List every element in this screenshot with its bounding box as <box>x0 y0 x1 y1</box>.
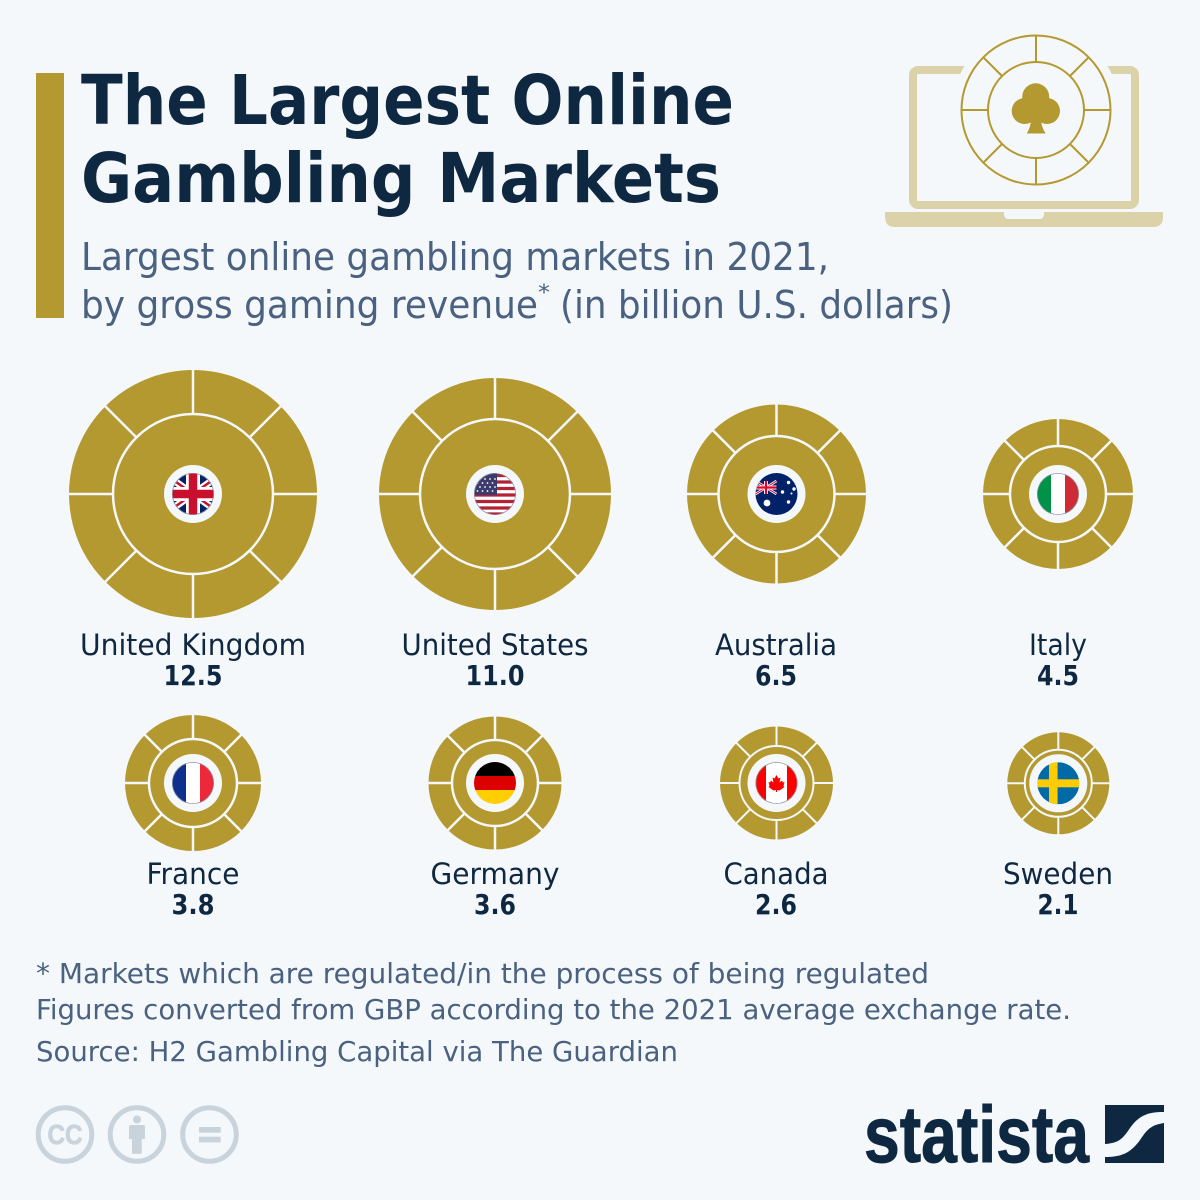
icon: creative commons attribution <box>38 1108 92 1161</box>
chip: Canada <box>718 725 834 841</box>
subtitle: * <box>538 281 550 306</box>
label: United States 11.0: United States <box>402 628 588 662</box>
label: Australia 6.5: Australia <box>715 628 837 662</box>
flag: United Kingdom <box>172 473 214 515</box>
label: Canada 2.6 <box>724 857 828 921</box>
footnotes: Figures converted from GBP according to the 2021 average exchange rate. <box>36 993 1071 1026</box>
label: France 3.8: 3.8 <box>172 888 214 921</box>
chip: Germany <box>427 715 563 851</box>
footnotes: * Markets which are regulated/in the process of being regulated <box>36 957 929 990</box>
subtitle: by gross gaming revenue <box>81 283 538 327</box>
title <box>81 61 734 219</box>
label: Germany 3.6: 3.6 <box>474 888 516 921</box>
subtitle: Largest online gambling markets in 2021, <box>81 235 829 279</box>
source: Source: H2 Gambling Capital via The Guardian <box>36 1035 678 1068</box>
label: United Kingdom 12.5: 12.5 <box>164 659 222 692</box>
label: Germany 3.6: Germany <box>430 857 560 891</box>
subtitle <box>81 235 953 327</box>
label: United States 11.0: 11.0 <box>466 659 524 692</box>
label: United Kingdom 12.5 <box>80 628 306 692</box>
label: Italy 4.5 <box>1029 628 1087 692</box>
label: France 3.8 <box>146 857 240 921</box>
flag: Sweden <box>1037 762 1079 804</box>
label: Sweden 2.1: Sweden <box>1003 857 1113 891</box>
flag: Italy <box>1037 473 1079 515</box>
chip: Australia <box>686 403 868 585</box>
icon: equals <box>183 1108 236 1161</box>
chip: Sweden <box>1005 730 1111 836</box>
chip: France <box>124 714 262 852</box>
chip: United States <box>378 377 612 611</box>
subtitle: (in billion U.S. dollars) <box>560 283 953 327</box>
footnotes <box>36 957 1071 1026</box>
label: Italy 4.5: 4.5 <box>1037 659 1079 692</box>
flag: Canada <box>756 762 798 804</box>
label: United States 11.0 <box>402 628 588 692</box>
icon: laptop with poker chip <box>885 26 1163 227</box>
title accent bar <box>36 73 64 318</box>
label: United Kingdom 12.5: United Kingdom <box>80 628 306 662</box>
title: The Largest Online <box>81 61 734 141</box>
label: Sweden 2.1 <box>1003 857 1113 921</box>
logo: statista: statista <box>864 1090 1089 1179</box>
label: Germany 3.6 <box>430 857 560 921</box>
label: Canada 2.6: Canada <box>724 857 828 891</box>
title: Gambling Markets <box>81 139 721 219</box>
chip: United Kingdom <box>68 369 318 619</box>
flag: Australia <box>756 473 798 515</box>
icon: creative commons attribution: CC <box>48 1119 82 1150</box>
label: Australia 6.5 <box>715 628 837 692</box>
label: France 3.8: France <box>146 857 240 891</box>
label: Sweden 2.1: 2.1 <box>1038 888 1078 921</box>
label: Italy 4.5: Italy <box>1029 628 1087 662</box>
flag: France <box>172 762 214 804</box>
label: Australia 6.5: 6.5 <box>755 659 797 692</box>
flag: United States <box>474 473 516 515</box>
icon: person <box>110 1108 164 1161</box>
chip: Italy <box>982 418 1134 570</box>
label: Canada 2.6: 2.6 <box>755 888 797 921</box>
flag: Germany <box>474 762 516 804</box>
